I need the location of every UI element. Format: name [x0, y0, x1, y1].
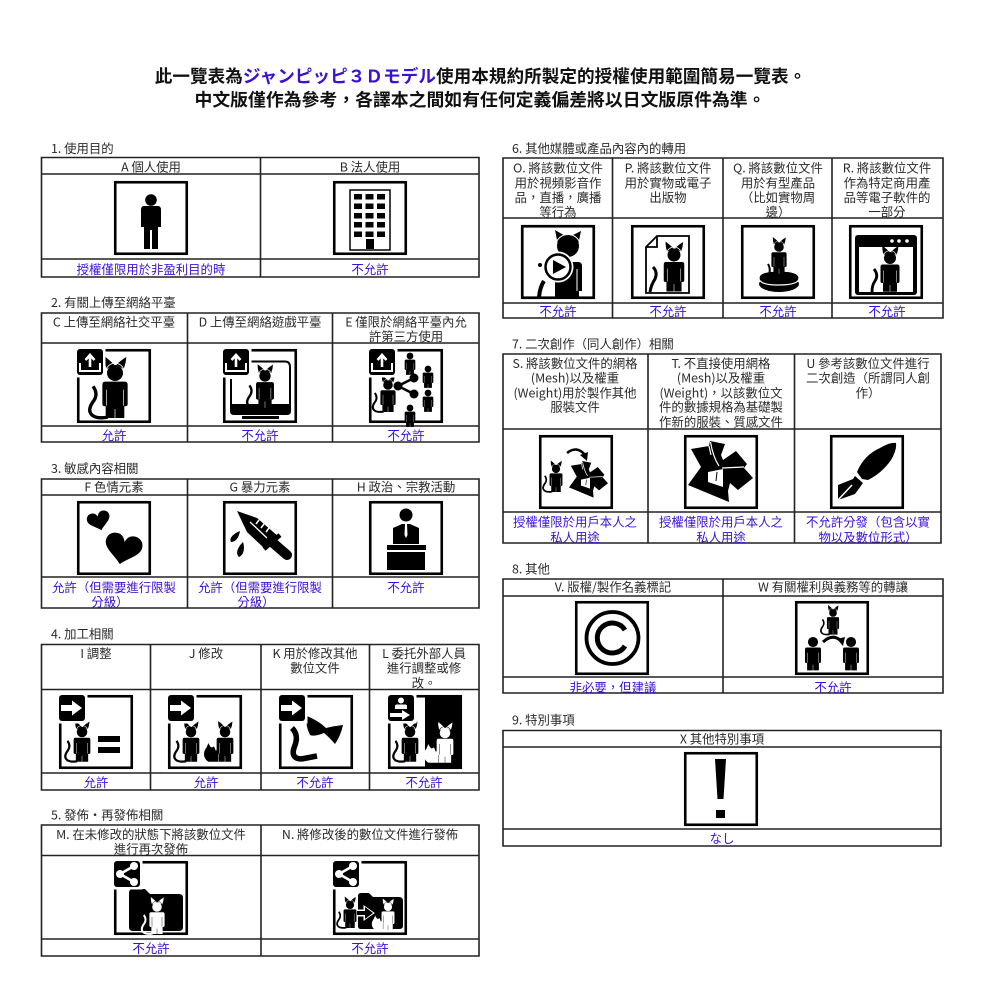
label: E: 許第三方使用	[369, 327, 443, 345]
panel: section 4 modification	[42, 624, 479, 791]
icon: fountain pen	[831, 436, 903, 508]
label: O: 用於視頻影音作	[515, 174, 601, 192]
status: O: 不允許	[539, 302, 577, 320]
label: Q: 邊）	[766, 203, 790, 221]
status: X: なし	[710, 829, 734, 847]
icon: redistribute	[113, 860, 187, 934]
icon: knife	[224, 502, 296, 574]
label: R: 一部分	[868, 203, 906, 221]
status: W: 不允許	[814, 678, 852, 696]
icon: transfer	[796, 602, 868, 674]
status: Q: 不允許	[759, 302, 797, 320]
status: A: 授權僅限用於非盈利目的時	[77, 260, 225, 278]
status: E: 不允許	[387, 426, 425, 444]
status: U: 不允許分發（包含以實	[806, 512, 930, 530]
label: A: A 個人使用	[121, 158, 181, 176]
icon: person	[115, 182, 187, 254]
label: S: (Mesh)以及權重	[531, 369, 619, 387]
icon: clothes	[685, 436, 757, 508]
label: R: 品等電子軟件的	[844, 188, 930, 206]
label: S: (Weight)用於製作其他	[513, 384, 637, 402]
heading: 2. 有關上傳至網絡平臺	[51, 293, 176, 311]
icon: exclamation	[685, 753, 757, 825]
status: D: 不允許	[241, 426, 279, 444]
heading: 8. 其他	[512, 560, 550, 578]
icon: modify	[167, 694, 241, 768]
label: Q: 用於有型產品	[741, 174, 815, 192]
label: J: J 修改	[189, 644, 223, 662]
table grid	[42, 313, 479, 442]
label: B: B 法人使用	[340, 158, 400, 176]
label: R: R. 將該數位文件	[843, 159, 931, 177]
label: M: 進行再次發佈	[114, 840, 188, 858]
icon: distribute modified	[332, 860, 406, 934]
label: O: O. 將該數位文件	[513, 159, 603, 177]
label: V: V. 版權/製作名義標記	[555, 578, 671, 596]
label: C: C 上傳至網絡社交平臺	[53, 313, 175, 331]
status: I: 允許	[84, 773, 108, 791]
label: R: 作為特定商用產	[844, 174, 930, 192]
label: U: 二次創造（所謂同人創	[806, 369, 930, 387]
label: I: I 調整	[80, 644, 112, 662]
status: R: 不允許	[868, 302, 906, 320]
label: Q: （比如實物周	[741, 188, 815, 206]
heading: 4. 加工相關	[51, 624, 114, 642]
heading: 9. 特別事項	[512, 710, 575, 728]
status: U: 物以及數位形式）	[818, 528, 918, 546]
label: K: 數位文件	[290, 659, 340, 677]
status: G: 分級）	[237, 592, 275, 610]
icon: video use	[522, 226, 594, 298]
label: H: H 政治、宗教活動	[357, 478, 455, 496]
table grid	[503, 158, 943, 318]
status: T: 授權僅限於用戶本人之	[659, 512, 783, 530]
panel: section 8 other	[503, 560, 943, 696]
status: S: 授權僅限於用戶本人之	[513, 512, 637, 530]
panel: section 3 sensitive content	[42, 459, 479, 610]
icon: parts for other data	[278, 694, 352, 768]
icon: commission	[387, 694, 462, 769]
table grid	[42, 158, 479, 277]
label: P: 用於實物或電子	[625, 174, 711, 192]
label: U: 作）	[856, 384, 880, 402]
panel: section 1 purpose of use	[42, 139, 479, 278]
status: T: 私人用途	[696, 528, 746, 546]
heading: 7. 二次創作（同人創作）相關	[512, 334, 674, 352]
table grid	[42, 644, 479, 790]
icon: upload social	[76, 348, 150, 422]
status: P: 不允許	[649, 302, 687, 320]
label: T: 件的數據規格為基礎製	[659, 398, 783, 416]
status: B: 不允許	[351, 260, 389, 278]
label: T: (Weight)，以該數位文	[659, 384, 783, 402]
label: G: G 暴力元素	[230, 478, 290, 496]
status: F: 允許（但需要進行限製	[52, 578, 176, 596]
status: V: 非必要，但建議	[570, 678, 656, 696]
table grid	[503, 579, 943, 693]
title: 此一覽表為ジャンピッピ３Ｄモデル使用本規約所製定的授權使用範圍簡易一覽表。	[155, 64, 806, 89]
label: U: U 參考該數位文件進行	[806, 354, 930, 372]
status: G: 允許（但需要進行限製	[198, 578, 322, 596]
status: H: 不允許	[387, 578, 425, 596]
status: J: 允許	[194, 773, 218, 791]
status: S: 私人用途	[550, 528, 600, 546]
status: K: 不允許	[296, 773, 334, 791]
label: K: K 用於修改其他	[272, 644, 358, 662]
label: L: 進行調整或修	[387, 659, 462, 677]
heading: 1. 使用目的	[51, 139, 114, 157]
label: L: L 委托外部人員	[382, 644, 466, 662]
title	[155, 64, 806, 112]
panel: section 9 special items	[503, 710, 941, 847]
table grid	[503, 354, 941, 543]
title: 中文版僅作為參考，各譯本之間如有任何定義偏差將以日文版原件為準。	[194, 86, 766, 112]
status: N: 不允許	[351, 939, 389, 957]
label: T: 作新的服裝、質感文件	[659, 413, 783, 431]
panel: section 7 derivative works	[503, 334, 941, 546]
icon: upload third party	[368, 348, 442, 427]
heading: 5. 發佈・再發佈相關	[51, 806, 163, 824]
label: N: N. 將修改後的數位文件進行發佈	[282, 825, 458, 843]
icon: office building	[334, 182, 406, 254]
table grid	[42, 825, 479, 956]
icon: cat to clothes	[540, 436, 612, 508]
panel: section 5 distribution	[42, 806, 479, 957]
label: T: (Mesh)以及權重	[677, 369, 765, 387]
label: S: S. 將該數位文件的網格	[512, 354, 638, 372]
status: C: 允許	[102, 426, 126, 444]
label: M: M. 在未修改的狀態下將該數位文件	[56, 825, 246, 843]
icon: physical goods	[742, 226, 814, 298]
table grid	[503, 730, 941, 846]
label: P: 出版物	[649, 188, 687, 206]
label: E: E 僅限於網絡平臺內允	[345, 313, 467, 331]
icon: software	[850, 226, 922, 298]
table grid	[42, 479, 479, 608]
label: S: 服裝文件	[550, 398, 600, 416]
icon: hearts	[78, 502, 150, 574]
label: W: W 有關權利與義務等的轉讓	[758, 578, 909, 596]
icon: copyright	[576, 602, 648, 674]
label: T: T. 不直接使用網格	[672, 354, 770, 372]
status: F: 分級）	[91, 592, 129, 610]
label: O: 品，直播，廣播	[515, 188, 602, 206]
icon: upload game	[222, 348, 296, 422]
heading: 6. 其他媒體或產品內容內的轉用	[512, 139, 686, 157]
status: M: 不允許	[132, 939, 170, 957]
icon: printed publication	[632, 226, 704, 298]
icon: politician	[370, 502, 442, 574]
panel: section 2 uploads	[42, 293, 479, 444]
icon: adjust	[58, 694, 132, 768]
label: O: 等行為	[539, 203, 577, 221]
label: F: F 色情元素	[84, 478, 144, 496]
panel: section 6 use in other media	[503, 139, 943, 320]
label: D: D 上傳至網絡遊戲平臺	[199, 313, 321, 331]
status: L: 不允許	[405, 773, 443, 791]
label: P: P. 將該數位文件	[625, 159, 711, 177]
heading: 3. 敏感內容相關	[51, 459, 138, 477]
label: X: X 其他特別事項	[680, 730, 765, 748]
label: L: 改。	[412, 674, 436, 692]
label: Q: Q. 將該數位文件	[733, 159, 823, 177]
